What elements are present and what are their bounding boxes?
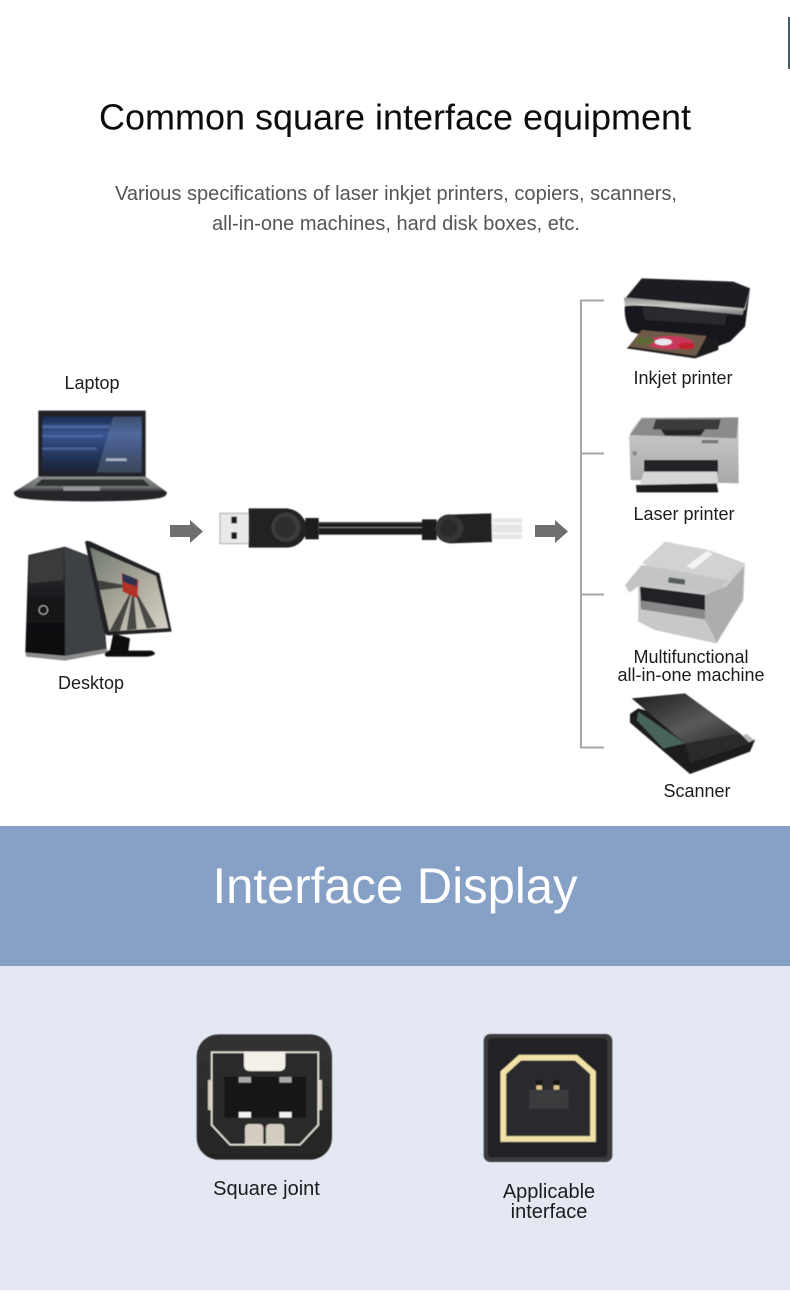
icon: desktop computer (25, 541, 172, 661)
USB-B plug (422, 513, 522, 543)
title: Common square interface equipment (99, 96, 691, 138)
tower (25, 547, 108, 661)
monitor (85, 541, 172, 657)
label: multifunction machine (617, 647, 765, 685)
USB-A plug (220, 508, 319, 548)
label: applicable interface: interface (511, 1201, 587, 1223)
label: multifunction machine: Multifunctional (633, 647, 749, 667)
panel: interface display (0, 966, 790, 1290)
icon: square joint (197, 1034, 332, 1160)
label: laptop: Laptop (64, 373, 120, 393)
bracket connector (581, 300, 604, 748)
subtitle: all-in-one machines, hard disk boxes, etc. (212, 213, 580, 235)
label: laser printer: Laser printer (633, 504, 735, 524)
label: scanner: Scanner (663, 781, 731, 801)
label: desktop: Desktop (58, 673, 124, 693)
top edge mark (788, 17, 790, 69)
subtitle (115, 183, 677, 235)
icon: scanner (630, 693, 755, 774)
cable (319, 522, 423, 535)
label: square joint: Square joint (213, 1178, 320, 1200)
icon: laptop (14, 411, 167, 501)
arrow: cable to devices (535, 520, 568, 543)
icon: applicable interface (484, 1034, 612, 1162)
icon: laser printer (629, 417, 739, 492)
icon: inkjet printer (624, 278, 750, 358)
label: inkjet printer: Inkjet printer (633, 368, 733, 388)
label: applicable interface: Applicable (503, 1181, 595, 1203)
subtitle: Various specifications of laser inkjet printers, copiers, scanners, (115, 183, 677, 205)
label: multifunction machine: all-in-one machine (617, 665, 765, 685)
arrow: input to cable (170, 520, 203, 543)
icon: multifunction machine (625, 542, 745, 643)
label: applicable interface (503, 1181, 595, 1223)
banner: Interface Display (0, 826, 790, 966)
banner heading: Interface Display (212, 858, 578, 914)
icon: USB A to B cable (220, 508, 522, 548)
